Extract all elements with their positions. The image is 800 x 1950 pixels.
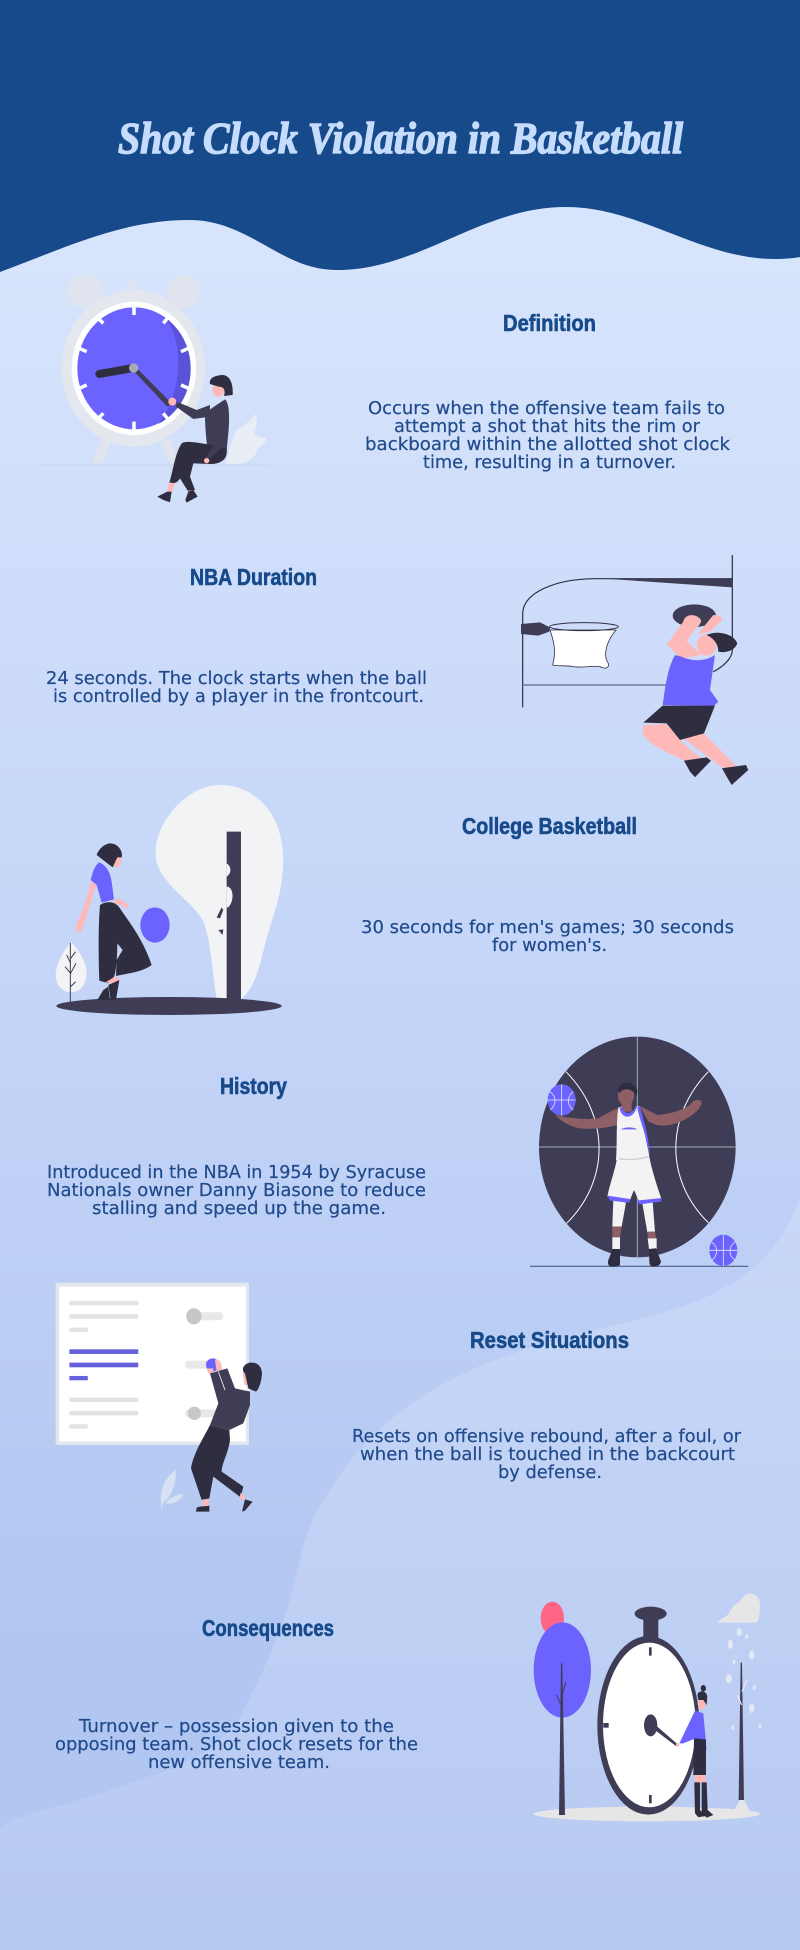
text: history body bbox=[47, 1163, 426, 1219]
text: NBA duration body: 24 seconds. The clock starts when the ball bbox=[46, 669, 427, 689]
text: consequences body: Turnover – possession given to the bbox=[78, 1717, 394, 1737]
header wave bbox=[0, 0, 800, 272]
big court circle bbox=[539, 1037, 736, 1257]
woman bbox=[191, 1358, 262, 1512]
panel: history bbox=[47, 1037, 748, 1267]
player bbox=[643, 604, 748, 785]
illustration: woman with ball and door bbox=[56, 785, 283, 1015]
ball bbox=[140, 907, 170, 943]
stopwatch bbox=[597, 1607, 699, 1815]
leaf bbox=[225, 413, 267, 464]
text: consequences body: new offensive team. bbox=[148, 1753, 330, 1773]
trees bbox=[534, 1602, 591, 1815]
heading: consequences: Consequences bbox=[202, 1615, 334, 1641]
ground line bbox=[530, 1265, 748, 1267]
woman bbox=[76, 843, 152, 1000]
white blob bbox=[156, 785, 283, 1000]
text: history body: Nationals owner Danny Biasone to reduce bbox=[47, 1181, 426, 1201]
heading: college basketball: College Basketball bbox=[462, 813, 637, 839]
woman bbox=[676, 1685, 713, 1818]
heading: reset situations: Reset Situations bbox=[470, 1327, 629, 1353]
illustration: woman turning alarm clock bbox=[40, 275, 268, 503]
snowy tree and cloud bbox=[717, 1594, 761, 1812]
door bbox=[227, 832, 241, 1000]
panel: reset situations bbox=[56, 1283, 742, 1512]
illustration: woman with stopwatch bbox=[533, 1594, 761, 1821]
icon: alarm clock bbox=[62, 275, 205, 463]
figure and door bbox=[56, 832, 282, 1015]
heading: history: History bbox=[220, 1073, 287, 1099]
text: college body: for women's. bbox=[492, 936, 607, 956]
text: consequences body bbox=[55, 1717, 418, 1773]
panel: definition bbox=[40, 275, 731, 503]
text: college body bbox=[361, 918, 734, 956]
plant bbox=[56, 942, 87, 1002]
illustration: woman at settings board bbox=[56, 1283, 280, 1512]
text: consequences body: opposing team. Shot clock resets for the bbox=[55, 1735, 418, 1755]
text: definition body bbox=[365, 399, 731, 473]
text: reset body: Resets on offensive rebound, after a foul, or bbox=[352, 1427, 742, 1447]
sliders bbox=[185, 1361, 210, 1369]
text: NBA duration body: is controlled by a player in the frontcourt. bbox=[53, 687, 424, 707]
text: history body: stalling and speed up the game. bbox=[92, 1199, 386, 1219]
leaves bbox=[161, 1469, 183, 1510]
illustration: player dunking bbox=[521, 555, 748, 785]
heading: definition: Definition bbox=[503, 310, 596, 336]
text: history body: Introduced in the NBA in 1954 by Syracuse bbox=[47, 1163, 426, 1183]
illustration: basketball player bbox=[530, 1037, 748, 1267]
heading: NBA duration: NBA Duration bbox=[190, 564, 317, 590]
slider knob bbox=[188, 1407, 201, 1420]
title: Shot Clock Violation in Basketball bbox=[118, 114, 684, 163]
text: reset body: by defense. bbox=[498, 1463, 602, 1483]
woman figure bbox=[157, 375, 233, 503]
panel: NBA duration bbox=[46, 555, 748, 785]
basketball right bbox=[709, 1235, 737, 1266]
ground line bbox=[40, 464, 268, 466]
text: reset body bbox=[352, 1427, 742, 1483]
settings board bbox=[56, 1283, 249, 1445]
ground bbox=[533, 1807, 760, 1821]
background light wave bbox=[0, 1197, 800, 1950]
panel: college basketball bbox=[56, 785, 734, 1015]
basketball left bbox=[548, 1084, 576, 1116]
hidden figure bbox=[227, 863, 233, 907]
panel: consequences bbox=[55, 1594, 761, 1821]
hoop bbox=[521, 555, 732, 707]
text: reset body: when the ball is touched in the backcourt bbox=[360, 1445, 735, 1465]
ground line bbox=[163, 1511, 280, 1513]
text: definition body: time, resulting in a turnover. bbox=[423, 453, 676, 473]
player bbox=[555, 1082, 702, 1267]
ground bbox=[56, 997, 282, 1015]
figure group bbox=[161, 1358, 280, 1512]
text: college body: 30 seconds for men's games; 30 seconds bbox=[361, 918, 734, 938]
text: definition body: Occurs when the offensive team fails to bbox=[368, 399, 725, 419]
text: definition body: attempt a shot that hits the rim or bbox=[394, 417, 701, 437]
text: NBA duration body bbox=[46, 669, 427, 707]
text: definition body: backboard within the allotted shot clock bbox=[365, 435, 731, 455]
